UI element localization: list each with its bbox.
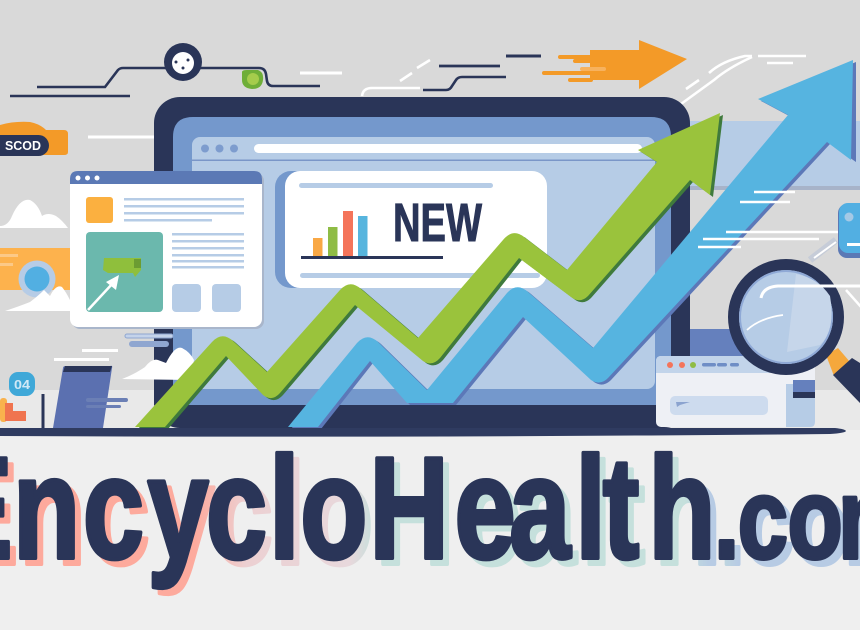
text lines	[124, 198, 244, 268]
arrow: green growth arrow	[135, 113, 723, 429]
title: EncycloHealth.com	[0, 427, 860, 596]
arrow: orange speed arrow	[542, 40, 687, 89]
browser address bar	[192, 144, 655, 161]
icon: orange SCOD tag	[0, 122, 68, 156]
icon: magnifying glass	[734, 264, 860, 403]
icon: teal 04 badge: 04	[14, 377, 31, 392]
blue connector lines under left window	[125, 320, 192, 405]
small tiles	[172, 284, 201, 312]
tag text: SCOD	[5, 138, 41, 153]
laptop frame	[154, 97, 690, 428]
icon: red-orange shapes	[0, 398, 26, 422]
icon: teal 04 badge	[9, 372, 35, 396]
bar chart	[301, 211, 443, 259]
panel: left browser window	[70, 171, 264, 329]
laptop inner bezel	[173, 117, 671, 405]
laptop screen	[192, 137, 655, 389]
icon: orange square	[86, 197, 113, 223]
top middle lines	[362, 56, 541, 96]
ground line	[0, 428, 846, 437]
panel: small browser window	[656, 329, 815, 427]
icon: small tablet with badge	[43, 349, 128, 430]
white speed lines left	[88, 73, 342, 137]
icon: green blob	[242, 70, 263, 89]
white motion lines by blue arrow	[698, 192, 855, 247]
teal image tile with arrow	[86, 232, 163, 312]
white swoosh lines right	[681, 56, 806, 104]
top-left circuit line with node	[10, 43, 320, 96]
arrow: blue growth arrow	[288, 60, 856, 429]
heading: NEW: NEW	[393, 193, 482, 253]
icon: blue app badge	[810, 203, 860, 260]
clouds left	[0, 200, 194, 380]
laptop	[154, 97, 690, 428]
panel: orange card with location circle	[0, 248, 70, 298]
panel: right background card	[680, 121, 860, 190]
panel: NEW chart card	[275, 171, 547, 288]
